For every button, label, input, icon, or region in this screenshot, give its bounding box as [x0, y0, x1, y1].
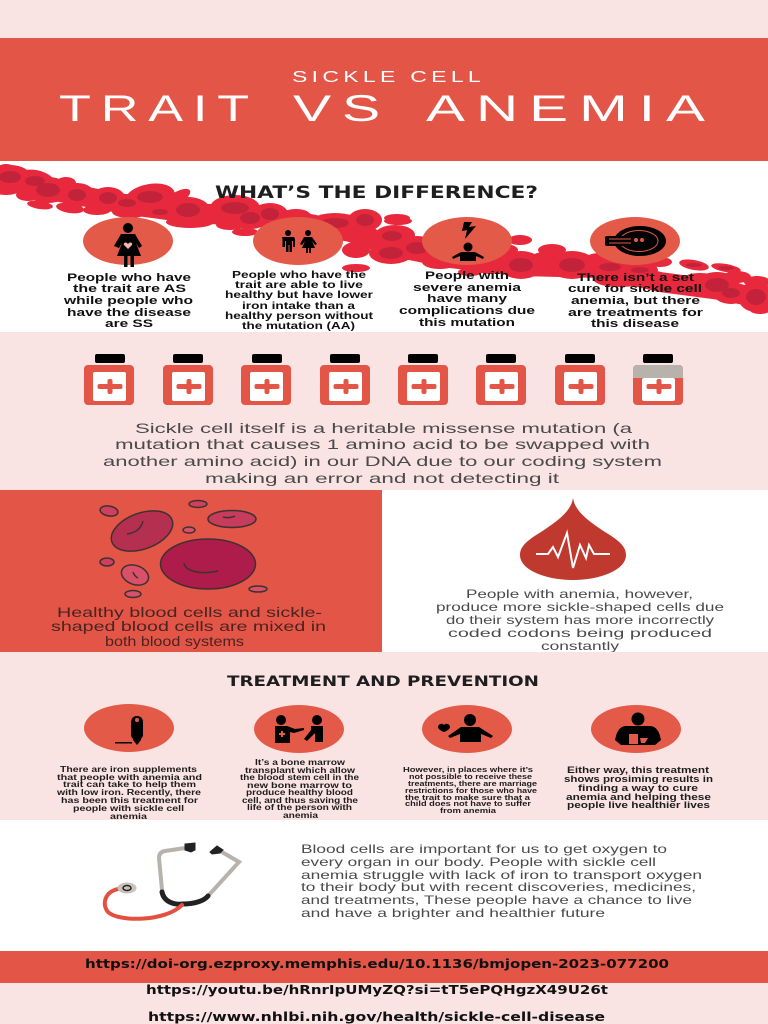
text: mixed cells: shaped blood cells are mixed in — [51, 618, 326, 634]
caption: no set cure — [568, 272, 704, 330]
caption: iron supplements: trait can take to help them — [63, 780, 196, 789]
caption: marriage restrictions — [403, 765, 537, 815]
panel: what's the difference — [0, 161, 768, 332]
caption: iron supplements: with low iron. Recently, there — [56, 788, 202, 797]
text: conclusion: and have a brighter and healthier future — [301, 906, 605, 920]
title — [59, 88, 716, 129]
caption: severe anemia: complications due — [399, 305, 535, 317]
caption: marriage restrictions: from anemia — [440, 806, 497, 815]
subtitle: SICKLE CELL — [292, 69, 485, 86]
caption: marriage restrictions: the trait to make sure that a — [405, 793, 531, 802]
caption: AS vs SS: the trait are AS — [73, 283, 186, 295]
title: VS — [293, 88, 391, 129]
caption: AS vs SS: while people who — [63, 295, 193, 307]
caption: marriage restrictions: not possible to receive these — [409, 772, 532, 781]
panel: treatment and prevention — [0, 652, 768, 821]
text: conclusion: anemia struggle with lack of iron to transport oxygen — [301, 868, 702, 882]
caption: severe anemia: severe anemia — [413, 282, 522, 294]
heading: what's the difference: WHAT’S THE DIFFERENCE? — [215, 183, 538, 203]
text: conclusion: and treatments, These people have a chance to live — [301, 893, 692, 907]
caption: promising results — [564, 765, 713, 811]
caption: iron supplements: that people with anemia and — [57, 773, 202, 782]
caption: severe anemia: People with — [425, 270, 509, 282]
text: conclusion: Blood cells are important for us to get oxygen to — [301, 842, 667, 856]
title: TRAIT — [59, 88, 259, 129]
caption: marriage restrictions: child does not have to suffer — [405, 799, 531, 808]
caption: bone marrow transplant: It’s a bone marrow — [255, 758, 346, 767]
panel: sources — [0, 951, 768, 1024]
caption: bone marrow transplant: transplant which allow — [245, 766, 356, 775]
text: anemia cells: People with anemia, however, — [466, 587, 693, 601]
icon: person with heart — [422, 705, 512, 753]
panel: blood systems — [0, 490, 382, 652]
text: anemia cells: coded codons being produced — [448, 626, 712, 640]
icon: doctor and patient — [254, 705, 344, 753]
text: mutation explanation: another amino acid) in our DNA due to our coding system — [103, 453, 662, 469]
caption: promising results: anemia and helping these — [566, 792, 711, 803]
text: mutation explanation — [103, 420, 662, 486]
caption: bone marrow transplant: the blood stem cell in the — [240, 773, 360, 782]
blood cell band — [0, 164, 768, 314]
icon: stethoscope — [105, 843, 239, 919]
caption: no set cure: this disease — [591, 318, 679, 330]
text: anemia cells: do their system has more incorrectly — [446, 613, 714, 627]
caption: no set cure: are treatments for — [568, 307, 704, 319]
icon: supplement capsule — [84, 704, 174, 752]
caption: bone marrow transplant: new bone marrow to — [247, 781, 352, 790]
text: mutation explanation: mutation that causes 1 amino acid to be swapped with — [115, 436, 650, 452]
caption: promising results: shows prosiming results in — [564, 774, 713, 785]
panel: title banner — [0, 38, 768, 161]
caption: no set cure: anemia, but there — [571, 295, 700, 307]
caption: marriage restrictions: restrictions for those who have — [405, 786, 537, 795]
caption: severe anemia: this mutation — [419, 317, 515, 329]
source link 2: https://youtu.be/hRnrIpUMyZQ?si=tT5ePQHgzX49U26t — [146, 983, 608, 997]
caption: no set cure: cure for sickle cell — [568, 283, 702, 295]
text: anemia cells: constantly — [541, 639, 619, 653]
source link 3: https://www.nhlbi.nih.gov/health/sickle-cell-disease — [148, 1010, 605, 1024]
text: anemia cells — [436, 587, 724, 653]
caption: iron supplements: There are iron supplements — [60, 765, 198, 774]
icon: man and woman — [253, 217, 343, 265]
panel: mutation explanation — [0, 332, 768, 490]
caption: bone marrow transplant: anemia — [283, 811, 319, 820]
caption: trait carriers — [225, 270, 374, 332]
icon: MRI scanner — [590, 217, 680, 265]
caption: AS vs SS: People who have — [67, 272, 191, 284]
icon: woman — [83, 217, 173, 267]
caption: bone marrow transplant: cell, and thus saving the — [242, 796, 359, 805]
caption: AS vs SS — [63, 272, 193, 330]
caption: trait carriers: the mutation (AA) — [242, 321, 355, 332]
caption: trait carriers: healthy but have lower — [225, 290, 373, 301]
caption: bone marrow transplant — [240, 758, 360, 820]
icon: person with food tray — [591, 705, 681, 753]
text: mixed cells: Healthy blood cells and sickle- — [57, 604, 322, 620]
text: anemia cells: produce more sickle-shaped cells due — [436, 600, 724, 614]
caption: trait carriers: healthy person without — [225, 311, 374, 322]
caption: iron supplements: people with sickle cell — [73, 804, 184, 813]
caption: trait carriers: iron intake than a — [242, 301, 356, 312]
title: ANEMIA — [426, 88, 716, 129]
text: conclusion — [301, 842, 702, 920]
caption: promising results: people live healthier lives — [567, 800, 710, 811]
caption: bone marrow transplant: produce healthy blood — [246, 788, 353, 797]
caption: marriage restrictions: treatments, there are marriage — [408, 779, 537, 788]
heading: treatment and prevention: TREATMENT AND PREVENTION — [227, 674, 539, 690]
icon row: medicine bottles — [84, 354, 683, 405]
text: mixed cells: both blood systems — [105, 633, 244, 649]
text: conclusion: to their body but with recent discoveries, medicines, — [301, 880, 696, 894]
caption: AS vs SS: are SS — [105, 318, 153, 330]
caption: iron supplements: has been this treatment for — [61, 796, 198, 805]
panel: conclusion — [0, 820, 768, 951]
panel: anemia cells — [384, 490, 768, 653]
caption: severe anemia — [399, 270, 535, 329]
caption: trait carriers: trait are able to live — [235, 280, 364, 291]
text: conclusion: every organ in our body. People with sickle cell — [301, 855, 656, 869]
illustration: blood cells — [99, 500, 267, 598]
icon: blood drop with pulse — [520, 498, 626, 580]
caption: marriage restrictions: However, in places where it’s — [403, 765, 533, 774]
text: mutation explanation: Sickle cell itself is a heritable missense mutation (a — [135, 420, 632, 436]
source link 1: https://doi-org.ezproxy.memphis.edu/10.1136/bmjopen-2023-077200 — [85, 957, 669, 971]
caption: promising results: finding a way to cure — [578, 783, 698, 794]
icon: person with lightning bolt — [422, 217, 512, 265]
caption: severe anemia: have many — [427, 293, 508, 305]
text: mixed cells — [51, 604, 326, 649]
caption: iron supplements: anemia — [110, 812, 148, 821]
caption: promising results: Either way, this treatment — [567, 765, 710, 776]
caption: trait carriers: People who have the — [232, 270, 367, 281]
text: mutation explanation: making an error and not detecting it — [205, 470, 559, 486]
caption: iron supplements — [56, 765, 202, 821]
caption: AS vs SS: have the disease — [67, 307, 191, 319]
caption: bone marrow transplant: life of the person with — [247, 803, 352, 812]
caption: no set cure: There isn’t a set — [577, 272, 694, 284]
